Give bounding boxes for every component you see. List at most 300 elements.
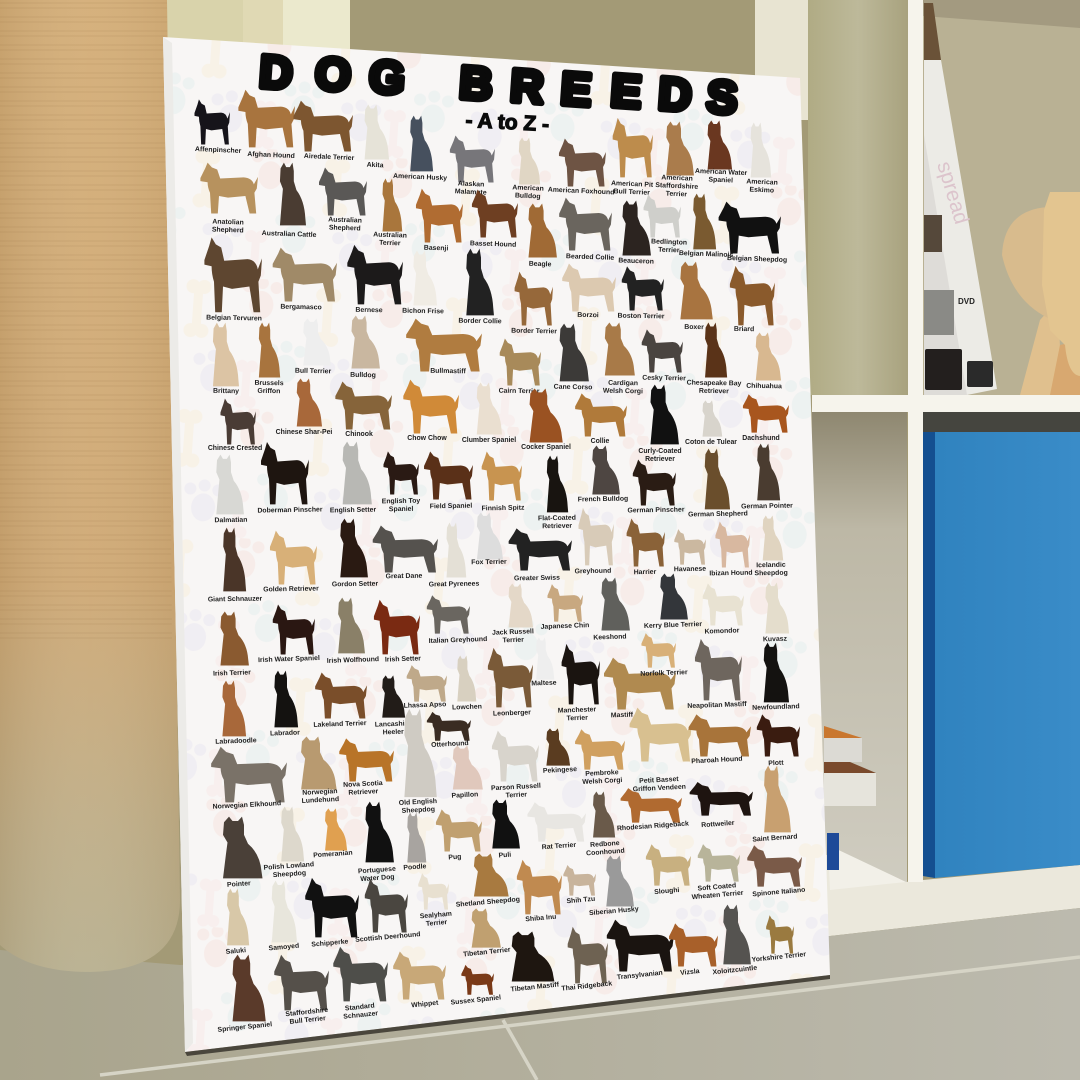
dog: American Husky: American Husky: [393, 173, 447, 182]
dog: Plott: [757, 714, 800, 767]
dog: Havanese: [674, 529, 706, 573]
dog: Tibetan Terrier: [463, 908, 511, 958]
dog: Italian Greyhound: Italian Greyhound: [429, 636, 487, 645]
dog: Lakeland Terrier: Lakeland Terrier: [313, 720, 367, 729]
dog: Field Spaniel: Field Spaniel: [430, 503, 472, 510]
dog: Coton de Tulear: [685, 400, 737, 446]
dog: Chinook: Chinook: [345, 431, 373, 438]
dog: Boston Terrier: [617, 266, 665, 320]
dog: Standard Schnauzer: Schnauzer: [343, 1010, 379, 1021]
dog: Icelandic Sheepdog: Icelandic: [756, 562, 786, 569]
dog: Kerry Blue Terrier: Kerry Blue Terrier: [644, 621, 702, 630]
dog: Beauceron: [618, 201, 654, 266]
dog: Anatolian Shepherd: Anatolian: [212, 218, 244, 227]
dog: Keeshond: Keeshond: [593, 633, 627, 642]
dog: Springer Spaniel: Springer Spaniel: [217, 1021, 273, 1034]
dog: Bearded Collie: Bearded Collie: [566, 253, 614, 262]
title: B: [458, 56, 495, 110]
dog: Portuguese Water Dog: [358, 802, 397, 883]
dog: Akita: [365, 105, 389, 169]
dog: Norwegian Lundehund: Norwegian: [302, 788, 338, 797]
dog: Pointer: [223, 817, 262, 889]
dog: Bergamasco: Bergamasco: [280, 304, 322, 311]
dog: Pointer: Pointer: [227, 880, 251, 889]
dog: Alaskan Malamute: Alaskan: [458, 180, 484, 189]
dog: Dalmatian: [214, 455, 248, 524]
dog: Standard Schnauzer: Standard: [345, 1002, 375, 1013]
dog: Brussels Griffon: [254, 323, 284, 395]
dog: Dachshund: [742, 394, 789, 442]
dog: Nova Scotia Retriever: Retriever: [348, 788, 379, 797]
dog: Bedlington Terrier: Terrier: [658, 247, 680, 254]
dog: Sussex Spaniel: Sussex Spaniel: [450, 994, 501, 1007]
dog: Alaskan Malamute: Malamute: [455, 188, 487, 197]
dog: Saluki: Saluki: [225, 947, 246, 956]
dog: Rhodesian Ridgeback: Rhodesian Ridgeback: [617, 820, 689, 833]
dog: Boxer: [680, 262, 713, 331]
DVD case: [924, 3, 997, 395]
dog: Fox Terrier: [471, 512, 507, 566]
dog: Old English Sheepdog: Sheepdog: [402, 806, 435, 815]
dog: English Toy Spaniel: English Toy: [382, 498, 420, 505]
dog: Bull Terrier: Bull Terrier: [295, 368, 332, 375]
dog: Belgian Malinois: [679, 194, 734, 259]
dog: Irish Wolfhound: [327, 598, 379, 665]
dog breeds grid: [194, 90, 807, 1034]
dog: Sussex Spaniel: [450, 965, 501, 1007]
dog: Chinese Shar-Pei: Chinese Shar-Pei: [276, 429, 332, 436]
dog: Komondor: [703, 583, 744, 636]
wooden vase: [0, 0, 180, 972]
dog: Jack Russell Terrier: Terrier: [502, 637, 524, 644]
dog: Standard Schnauzer: [333, 947, 388, 1021]
title: G: [367, 50, 407, 104]
dog: Labradoodle: Labradoodle: [215, 737, 257, 746]
dog: Australian Shepherd: Shepherd: [329, 224, 361, 233]
dog: German Shepherd: [688, 449, 748, 519]
dog: Boxer: Boxer: [684, 324, 704, 331]
dog: German Pointer: German Pointer: [741, 503, 793, 510]
dog: Belgian Sheepdog: Belgian Sheepdog: [727, 255, 787, 264]
dog: French Bulldog: French Bulldog: [578, 496, 628, 503]
dog: Pembroke Welsh Corgi: [575, 729, 625, 786]
dog: German Shepherd: German Shepherd: [688, 510, 748, 519]
dog: Flat-Coated Retriever: [538, 456, 576, 530]
dog: Kuvasz: [763, 583, 789, 643]
dog: Chihuahua: Chihuahua: [746, 383, 782, 390]
poster: [163, 37, 830, 1056]
dog: Beagle: Beagle: [529, 261, 552, 268]
dog: Lhassa Apso: [404, 665, 447, 710]
dog: Irish Water Spaniel: [258, 605, 320, 664]
dog: Norwegian Elkhound: Norwegian Elkhound: [213, 800, 281, 811]
dog: Bichon Frise: [402, 251, 444, 315]
dog: Springer Spaniel: [217, 955, 273, 1034]
dog: Brittany: [213, 323, 239, 395]
dog: Yorkshire Terrier: Yorkshire Terrier: [751, 951, 807, 964]
dog: Anatolian Shepherd: Shepherd: [212, 226, 244, 235]
dog: Shetland Sheepdog: Shetland Sheepdog: [456, 896, 520, 909]
dog: Japanese Chin: [541, 584, 589, 631]
dog: Japanese Chin: Japanese Chin: [541, 622, 589, 631]
dog: Airedale Terrier: [293, 101, 355, 162]
dog: Golden Retriever: [263, 531, 319, 593]
dog: Portuguese Water Dog: Water Dog: [360, 874, 395, 883]
dog: Cardigan Welsh Corgi: [603, 323, 643, 395]
dog: Great Pyrenees: Great Pyrenees: [429, 581, 479, 588]
dog: Irish Terrier: [213, 612, 251, 678]
dog: Bearded Collie: [559, 198, 614, 262]
dog: Great Dane: [373, 525, 438, 580]
dog: Border Terrier: [511, 272, 557, 335]
title: E: [559, 62, 593, 116]
dog: Pekingese: [543, 728, 577, 775]
dog: Komondor: Komondor: [704, 627, 740, 636]
dog: Lancashire Heeler: Heeler: [383, 729, 404, 736]
dog: Vizsla: [669, 923, 718, 977]
title: S: [705, 70, 739, 124]
dog: Rottweiler: Rottweiler: [701, 820, 735, 829]
dog: Redbone Coonhound: [585, 791, 625, 857]
dog: Tibetan Mastiff: Tibetan Mastiff: [510, 981, 560, 994]
dog: Vizsla: Vizsla: [680, 968, 700, 977]
dog: German Pinscher: [627, 459, 685, 514]
dog: Pekingese: Pekingese: [543, 766, 577, 775]
dog: Petit Basset Griffon Vendeen: Griffon Vendeen: [633, 784, 686, 793]
dog: Irish Setter: Irish Setter: [385, 655, 421, 664]
dog: Old English Sheepdog: [399, 709, 438, 815]
dog: Polish Lowland Sheepdog: Sheepdog: [273, 870, 306, 879]
dog: English Setter: English Setter: [330, 507, 377, 514]
dog: Basenji: Basenji: [424, 245, 449, 252]
dog: Harrier: [627, 518, 665, 576]
dog: Bulldog: Bulldog: [350, 372, 376, 379]
dog: Cocker Spaniel: [521, 389, 571, 451]
floor: [0, 908, 1080, 1080]
dog: American Staffordshire Terrier: Staffordshire: [655, 182, 698, 191]
dog: Australian Cattle: Australian Cattle: [262, 230, 317, 239]
dog: Chesapeake Bay Retriever: [686, 323, 742, 395]
dog: Sealyham Terrier: Sealyham: [420, 911, 452, 920]
dog: Beauceron: Beauceron: [618, 257, 654, 266]
title: R: [509, 59, 546, 113]
dog: Collie: Collie: [591, 438, 610, 445]
dog: Puli: Puli: [498, 852, 512, 859]
dog: Ibizan Hound: Ibizan Hound: [709, 570, 753, 577]
dog: Afghan Hound: Afghan Hound: [247, 151, 295, 160]
dog: Old English Sheepdog: Old English: [399, 798, 437, 807]
dog: Affenpinscher: Affenpinscher: [195, 146, 242, 155]
dog: Afghan Hound: [238, 90, 295, 160]
dog: Finnish Spitz: Finnish Spitz: [481, 505, 525, 512]
dog: Polish Lowland Sheepdog: Polish Lowland: [263, 861, 314, 872]
dog: American Staffordshire Terrier: [655, 122, 699, 199]
dog: Fox Terrier: Fox Terrier: [471, 559, 507, 566]
dog: Belgian Tervuren: Belgian Tervuren: [206, 315, 262, 322]
dog: Curly-Coated Retriever: Retriever: [645, 456, 675, 463]
dog: Australian Cattle: [262, 163, 317, 239]
dog: Curly-Coated Retriever: [638, 385, 682, 463]
dog: Spinone Italiano: [747, 845, 806, 898]
dog: Xoloitzcuintle: [712, 905, 758, 976]
dog: Chinese Shar-Pei: [276, 378, 332, 436]
dog: Cesky Terrier: [642, 329, 686, 382]
dog: Irish Setter: [374, 600, 421, 664]
dog: Gordon Setter: Gordon Setter: [332, 581, 379, 588]
dog: American Water Spaniel: Spaniel: [708, 176, 733, 185]
blue storage box: [923, 432, 1080, 878]
dog: Havanese: Havanese: [674, 566, 706, 573]
dog: Samoyed: Samoyed: [268, 943, 299, 952]
dog: Schipperke: Schipperke: [311, 938, 349, 949]
dog: Belgian Tervuren: [204, 237, 262, 322]
dog: Rhodesian Ridgeback: [617, 788, 689, 833]
dog: English Toy Spaniel: [382, 451, 421, 513]
dog: Brittany: Brittany: [213, 388, 239, 395]
dog: American Eskimo: Eskimo: [749, 186, 774, 195]
dog: Cardigan Welsh Corgi: Cardigan: [608, 380, 638, 387]
dog: Belgian Sheepdog: [719, 202, 787, 264]
dog: Labrador: [270, 671, 300, 738]
dog: Papillon: [451, 745, 483, 800]
dog: Poodle: [403, 813, 427, 872]
dog: Chow Chow: Chow Chow: [407, 435, 447, 442]
dog: Lowchen: [452, 655, 482, 712]
dog: Whippet: Whippet: [411, 1000, 439, 1009]
dog: Manchester Terrier: Terrier: [566, 715, 588, 722]
dog: Giant Schnauzer: Giant Schnauzer: [208, 596, 263, 603]
dog: Border Terrier: Border Terrier: [511, 328, 557, 335]
dog: Basenji: [416, 189, 463, 252]
dog: Pomeranian: Pomeranian: [313, 850, 353, 859]
dog: Great Pyrenees: [429, 523, 479, 588]
dog: Icelandic Sheepdog: [754, 515, 788, 577]
title: E: [609, 64, 643, 118]
stacked books: [824, 726, 876, 870]
dog: Manchester Terrier: [558, 644, 600, 723]
dog: Neapolitan Mastiff: [687, 639, 747, 710]
dog: Mastiff: Mastiff: [611, 712, 634, 719]
dog: Whippet: [393, 952, 446, 1009]
dog: American Bulldog: Bulldog: [515, 192, 541, 201]
dog: Cane Corso: [554, 324, 592, 391]
dog: Norfolk Terrier: [640, 633, 688, 678]
title: D: [657, 67, 694, 121]
dog: Saint Bernard: [752, 766, 798, 844]
dog: Icelandic Sheepdog: Sheepdog: [754, 570, 788, 577]
dog: Polish Lowland Sheepdog: [263, 807, 315, 880]
dog: Tibetan Mastiff: [510, 932, 560, 994]
dog: Bichon Frise: Bichon Frise: [402, 308, 444, 315]
dog: Boston Terrier: Boston Terrier: [617, 313, 665, 320]
dog: Bullmastiff: [406, 319, 482, 375]
dog: Bernese: [347, 245, 403, 314]
dog: Transylvanian: Transylvanian: [617, 970, 663, 981]
dog: English Toy Spaniel: Spaniel: [389, 506, 414, 513]
dog: Briard: Briard: [734, 326, 754, 333]
dog: Soft Coated Wheaten Terrier: Soft Coated: [697, 882, 736, 893]
dog: Collie: [575, 393, 627, 445]
dog: Pharoah Hound: Pharoah Hound: [691, 756, 743, 765]
title: D: [258, 45, 295, 99]
dog: Chow Chow: [403, 380, 459, 442]
dog: Shetland Sheepdog: [456, 853, 520, 909]
dog: American Water Spaniel: [694, 120, 748, 185]
dog: Cocker Spaniel: Cocker Spaniel: [521, 444, 571, 451]
dog: Border Collie: [458, 249, 502, 325]
dog: Irish Terrier: Irish Terrier: [213, 669, 251, 678]
dog: Parson Russell Terrier: Terrier: [506, 791, 527, 800]
dog: Affenpinscher: [194, 99, 242, 155]
dog: Bergamasco: [273, 248, 337, 311]
dog: Finnish Spitz: [481, 452, 525, 512]
dog: Manchester Terrier: Manchester: [558, 706, 596, 715]
dog: Anatolian Shepherd: [200, 163, 258, 235]
dog: Plott: Plott: [768, 760, 784, 767]
dog: Ibizan Hound: [709, 521, 753, 577]
dog: Transylvanian: [607, 920, 674, 981]
dog: Xoloitzcuintle: Xoloitzcuintle: [712, 965, 758, 976]
dog: Soft Coated Wheaten Terrier: Wheaten Terrier: [691, 890, 744, 901]
dog: Leonberger: Leonberger: [493, 709, 531, 718]
dog: Rottweiler: [690, 782, 753, 829]
dog: Clumber Spaniel: Clumber Spaniel: [462, 437, 516, 444]
dog: Norwegian Elkhound: [211, 747, 287, 811]
dog: Thai Ridgeback: Thai Ridgeback: [561, 980, 613, 993]
dog: Leonberger: [488, 648, 533, 718]
dog: Pembroke Welsh Corgi: Welsh Corgi: [582, 777, 623, 786]
dog: Brussels Griffon: Brussels: [254, 380, 284, 387]
dog: Basset Hound: [470, 190, 518, 249]
dog: Chinese Crested: Chinese Crested: [208, 445, 262, 452]
dog: Basset Hound: Basset Hound: [470, 240, 516, 249]
dog: Greater Swiss: Greater Swiss: [514, 575, 560, 582]
dog: Beagle: [528, 204, 557, 268]
dog: Shiba Inu: [517, 860, 562, 923]
dog: Pomeranian: [313, 808, 353, 859]
wooden elephant: [1002, 192, 1080, 395]
dog: Doberman Pinscher: [257, 442, 323, 515]
title: [258, 45, 739, 136]
dog: Pug: [436, 809, 482, 861]
dog: Border Collie: Border Collie: [458, 318, 502, 325]
title: O: [313, 47, 353, 101]
dog: Pug: Pug: [448, 854, 462, 861]
dog: American Husky: [393, 116, 447, 182]
dog: Australian Terrier: Terrier: [379, 240, 401, 247]
dog: Siberian Husky: Siberian Husky: [589, 906, 639, 917]
dog: Bullmastiff: Bullmastiff: [430, 368, 467, 375]
dog: American Staffordshire Terrier: American: [661, 174, 693, 183]
dog: Great Dane: Great Dane: [386, 573, 423, 580]
dog: Sealyham Terrier: Terrier: [426, 919, 448, 928]
dog: Australian Terrier: [373, 179, 407, 248]
dog: Bedlington Terrier: Bedlington: [651, 238, 687, 247]
dog: Jack Russell Terrier: [492, 583, 534, 645]
dog: Sloughi: [646, 844, 691, 896]
dog: American Foxhound: American Foxhound: [548, 187, 614, 196]
dog: Rat Terrier: [527, 802, 586, 851]
dog: Labradoodle: [215, 681, 257, 746]
dog: Chinook: [335, 382, 392, 438]
dog: Petit Basset Griffon Vendeen: Petit Basset: [639, 776, 679, 785]
dog: Kuvasz: Kuvasz: [763, 636, 788, 643]
dog: Sealyham Terrier: [418, 873, 453, 928]
dog: Sloughi: Sloughi: [654, 887, 680, 896]
dog: Australian Terrier: Australian: [373, 231, 407, 240]
dog: Flat-Coated Retriever: Retriever: [542, 523, 572, 530]
dog: Parson Russell Terrier: [491, 731, 541, 800]
dog: Saint Bernard: Saint Bernard: [752, 833, 798, 844]
dog: French Bulldog: [578, 446, 628, 503]
dog: Thai Ridgeback: [561, 927, 613, 993]
dog: Schipperke: [305, 878, 359, 949]
dog: Pharoah Hound: [689, 714, 751, 765]
dog: Coton de Tulear: Coton de Tulear: [685, 439, 737, 446]
dog: Norwegian Lundehund: [301, 737, 339, 805]
dog: Chesapeake Bay Retriever: Retriever: [699, 388, 729, 395]
dog: Samoyed: [268, 881, 299, 952]
dog: Dalmatian: Dalmatian: [214, 517, 248, 524]
dog: Greyhound: Greyhound: [575, 568, 611, 575]
dog: American Bulldog: American: [512, 184, 544, 193]
dog: American Pit Bull Terrier: [611, 118, 654, 197]
dog: Otterhound: Otterhound: [431, 740, 469, 749]
dog: Briard: [730, 266, 775, 333]
dog: Nova Scotia Retriever: Nova Scotia: [343, 780, 383, 789]
dog: Chesapeake Bay Retriever: Chesapeake Bay: [687, 380, 741, 387]
dog: Maltese: Maltese: [531, 680, 557, 687]
dog: Pembroke Welsh Corgi: Pembroke: [585, 769, 619, 778]
dog: Parson Russell Terrier: Parson Russell: [491, 783, 541, 792]
dog: Keeshond: [593, 578, 630, 642]
dog: Puli: [492, 800, 520, 859]
dog: American Eskimo: [746, 123, 778, 195]
dog: Redbone Coonhound: Redbone: [590, 840, 620, 849]
dog: Bedlington Terrier: [644, 194, 687, 255]
dog: Alaskan Malamute: [450, 135, 495, 197]
dog: Jack Russell Terrier: Jack Russell: [492, 628, 534, 637]
dog: Redbone Coonhound: Coonhound: [586, 848, 625, 857]
dog: Italian Greyhound: [427, 595, 487, 645]
dog: American Pit Bull Terrier: American Pit: [611, 180, 653, 189]
dog: Rat Terrier: Rat Terrier: [542, 842, 577, 851]
dog: Irish Water Spaniel: Irish Water Spaniel: [258, 655, 320, 664]
dog: Shih Tzu: Shih Tzu: [566, 896, 595, 905]
subtitle: - A to Z -: [465, 109, 550, 136]
dog: Doberman Pinscher: Doberman Pinscher: [257, 506, 323, 515]
dog: Golden Retriever: Golden Retriever: [263, 586, 319, 593]
dog: Scottish Deerhound: [355, 879, 421, 944]
dog: Portuguese Water Dog: Portuguese: [358, 866, 396, 875]
dog: Borzoi: [562, 264, 616, 319]
dog: Lancashire Heeler: Lancashire: [375, 720, 411, 729]
dog: Staffordshire Bull Terrier: Bull Terrier: [289, 1015, 326, 1026]
dog: Curly-Coated Retriever: Curly-Coated: [638, 448, 682, 455]
dog: Tibetan Terrier: Tibetan Terrier: [463, 947, 511, 958]
dog: American Bulldog: [512, 137, 544, 201]
dog: Labrador: Labrador: [270, 729, 300, 738]
dog: Australian Shepherd: [319, 168, 367, 233]
dog: Lhassa Apso: Lhassa Apso: [404, 701, 446, 710]
dog: American Eskimo: American: [746, 178, 778, 187]
dog: Norwegian Lundehund: Lundehund: [301, 796, 339, 805]
dog: Norfolk Terrier: Norfolk Terrier: [640, 669, 688, 678]
dog: Irish Wolfhound: Irish Wolfhound: [327, 656, 379, 665]
dog: Cardigan Welsh Corgi: Welsh Corgi: [603, 388, 643, 395]
dog: Cesky Terrier: Cesky Terrier: [642, 375, 686, 382]
dog: Kerry Blue Terrier: [644, 573, 702, 630]
